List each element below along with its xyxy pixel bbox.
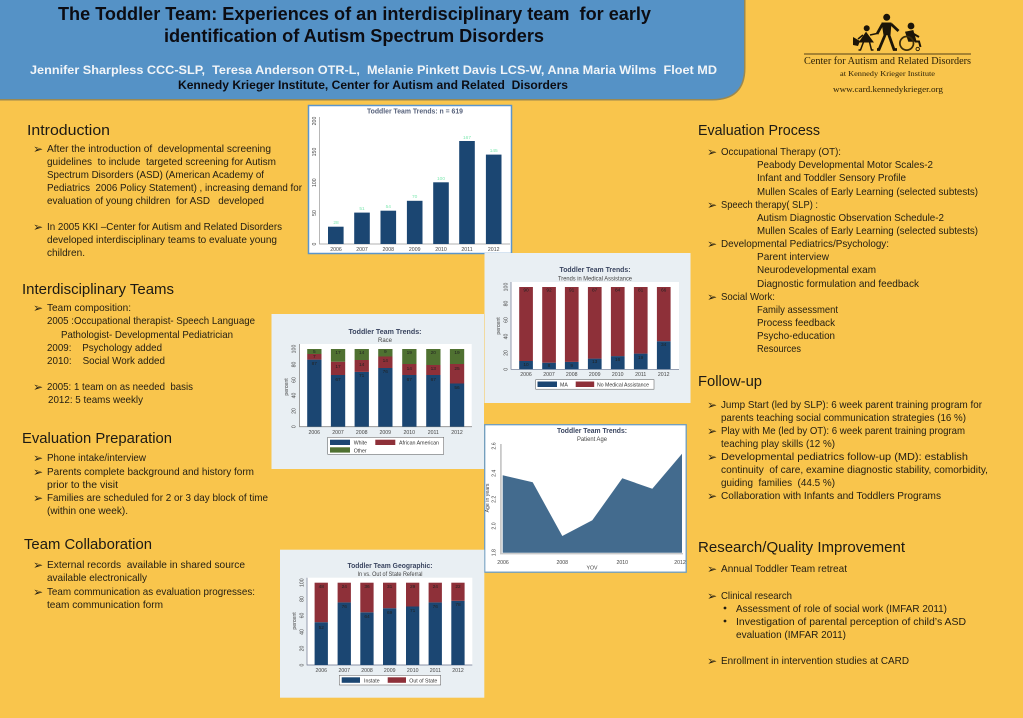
stacked bar chart: In vs. Out of State Referral: 29 <box>410 584 416 590</box>
stacked bar chart: In vs. Out of State Referral: 48 <box>319 584 324 590</box>
area chart: Patient Age: YOV <box>587 566 598 572</box>
bar chart: Trends in Medical Assistance: 80 <box>504 301 510 306</box>
stacked bar chart: In vs. Out of State Referral: 2011 <box>430 668 441 674</box>
text block: research bullets: Investigation of parental perception of child’s ASD <box>736 616 966 628</box>
text block: preparation bullets: Families are scheduled for 2 or 3 day block of time <box>47 492 268 504</box>
logo: Center for Autism and Related Disorders: at Kennedy Krieger Institute <box>840 69 936 78</box>
text block: preparation bullets <box>33 451 268 517</box>
area chart: Patient Age: 1.8 <box>492 549 498 556</box>
text block: collaboration bullets: External records available in shared source <box>47 559 245 571</box>
bar chart: Toddler Team Trends n = 619: 145 <box>490 148 498 154</box>
legend: No Medical Assistance <box>597 382 649 388</box>
text block: team composition: Pathologist- Developmental Pediatrician <box>61 329 233 341</box>
legend: MA <box>560 382 568 388</box>
text block: evaluation process list: Parent interview <box>757 251 829 263</box>
stacked bar chart: Race: 17 <box>335 364 341 370</box>
text block: evaluation process list: Diagnostic formulation and feedback <box>757 278 920 290</box>
stacked bar chart: In vs. Out of State Referral: 80 <box>300 596 306 602</box>
stacked bar chart: In vs. Out of State Referral: 20 <box>300 646 306 651</box>
stacked bar chart: Race: 20 <box>431 350 436 356</box>
stacked bar chart: Race: percent <box>284 378 290 396</box>
text block: evaluation process list: Resources <box>757 343 801 355</box>
title <box>58 4 651 46</box>
bar chart: Trends in Medical Assistance: 100 <box>504 283 510 291</box>
text block: research bullets: evaluation (IMFAR 2011) <box>736 629 846 641</box>
stacked bar chart: Race: 14 <box>359 350 365 356</box>
area chart: Patient Age: Toddler Team Trends: <box>557 426 627 435</box>
text block: introduction bullets: In 2005 KKI –Center for Autism and Related Disorders <box>47 221 282 233</box>
text block: team composition: Team composition: <box>47 302 131 314</box>
stacked bar chart: Race: 14 <box>407 366 412 372</box>
text block: evaluation process list: Developmental Pediatrics/Psychology: <box>721 238 889 250</box>
bar chart: Trends in Medical Assistance <box>484 253 690 403</box>
legend: Out of State <box>409 678 437 684</box>
header banner <box>0 0 746 100</box>
stacked bar chart: Race: Race <box>378 338 393 344</box>
stacked bar chart: In vs. Out of State Referral: 36 <box>364 584 370 590</box>
bar chart: Trends in Medical Assistance: 19 <box>638 355 644 361</box>
bar chart: Trends in Medical Assistance: 20 <box>504 350 510 356</box>
stacked bar chart: In vs. Out of State Referral: 100 <box>300 578 306 587</box>
text block: follow-up bullets: Jump Start (led by SLP): 6 week parent training program for <box>721 399 982 411</box>
text block: follow-up bullets: ➢ <box>707 450 717 464</box>
text block: introduction bullets: guidelines to include targeted screening for Autism <box>47 156 276 168</box>
bar chart: Trends in Medical Assistance: 84 <box>615 288 621 294</box>
bar chart: Trends in Medical Assistance: 2010 <box>612 372 624 378</box>
area chart: Patient Age: 2006 <box>497 560 509 566</box>
text block: evaluation process list: Process feedback <box>757 317 836 329</box>
text block: follow-up bullets: teaching play skills (12 %) <box>721 438 835 450</box>
text block: introduction bullets: Pediatrics 2006 Policy Statement) , increasing demand for <box>47 182 302 194</box>
text block: follow-up bullets: Developmental pediatrics follow-up (MD): establish <box>721 451 968 463</box>
text block: follow-up bullets: parents teaching social communication strategies (16 %) <box>721 412 966 424</box>
heading: Interdisciplinary Teams: Interdisciplinary Teams <box>22 281 174 298</box>
area chart: Patient Age: 2010 <box>617 560 628 566</box>
stacked bar chart: Race: 67 <box>431 377 436 383</box>
area chart: Patient Age: 2.6 <box>492 442 498 450</box>
text block: collaboration bullets: Team communication as evaluation progresses: <box>47 586 255 598</box>
stacked bar chart: In vs. Out of State Referral: 2010 <box>407 668 419 674</box>
stacked bar chart: Race: 71 <box>359 373 365 379</box>
bar chart: Trends in Medical Assistance: percent <box>496 317 502 335</box>
bar chart: Toddler Team Trends n = 619: 2010 <box>435 247 447 253</box>
stacked bar chart: In vs. Out of State Referral: 2007 <box>339 668 350 674</box>
stacked bar chart: Race: 17 <box>335 350 341 356</box>
bar chart: Toddler Team Trends n = 619 <box>308 106 512 254</box>
legend: African American <box>399 440 439 446</box>
stacked bar chart: In vs. Out of State Referral: Toddler Team Geographic: <box>348 561 432 570</box>
stacked bar chart: Race: 19 <box>407 350 412 356</box>
text block: introduction bullets: Spectrum Disorders (ASD) (American Academy of <box>47 169 264 181</box>
text block: research bullets: Annual Toddler Team retreat <box>721 563 847 575</box>
text block: evaluation process list: Speech therapy( SLP) : <box>721 199 818 211</box>
text block: team composition: 2012: 5 teams weekly <box>48 394 144 406</box>
bar chart: Toddler Team Trends n = 619: 2012 <box>488 247 500 253</box>
stacked bar chart: Race: 14 <box>359 362 365 368</box>
text block: follow-up bullets: guiding families (44.5 %) <box>721 477 835 489</box>
text block: follow-up bullets: Collaboration with Infants and Toddlers Programs <box>721 490 941 502</box>
heading: Research/Quality Improvement: Research/Quality Improvement <box>698 539 906 556</box>
text block: collaboration bullets: ➢ <box>33 585 43 599</box>
text block: team composition: 2010: Social Work added <box>47 355 165 367</box>
bar chart: Toddler Team Trends n = 619: 150 <box>312 148 318 156</box>
legend <box>339 675 441 685</box>
bar chart: Toddler Team Trends n = 619: 51 <box>359 206 365 212</box>
text block: evaluation process list: ➢ <box>707 290 717 304</box>
heading: Evaluation Process: Evaluation Process <box>698 122 820 139</box>
stacked bar chart: Race: 25 <box>454 366 460 372</box>
text block: evaluation process list: Autism Diagnostic Observation Schedule-2 <box>757 212 944 224</box>
heading: Introduction: Introduction <box>27 122 110 139</box>
bar chart: Toddler Team Trends n = 619: Toddler Team Trends: n = 619 <box>367 106 463 116</box>
authors: Jennifer Sharpless CCC-SLP, Teresa Anderson OTR-L, Melanie Pinkett Davis LCS-W, Anna Maria Wilms Floet MD <box>30 63 717 77</box>
heading: Evaluation Preparation: Evaluation Preparation <box>22 430 172 447</box>
stacked bar chart: In vs. Out of State Referral: 2006 <box>316 668 327 674</box>
text block: evaluation process list: ➢ <box>707 237 717 251</box>
stacked bar chart: Race: 40 <box>292 393 298 398</box>
stacked bar chart: Race: 56 <box>454 385 460 391</box>
text block: team composition: 2005 :Occupational therapist- Speech Language <box>47 315 255 327</box>
stacked bar chart: In vs. Out of State Referral: 24 <box>433 584 438 590</box>
logo: Center for Autism and Related Disorders: Center for Autism and Related Disorders <box>804 56 971 67</box>
text block: introduction bullets: children. <box>47 247 85 259</box>
bar chart: Trends in Medical Assistance: 92 <box>546 288 552 294</box>
stacked bar chart: Race: 2008 <box>356 430 368 436</box>
stacked bar chart: In vs. Out of State Referral: 0 <box>300 663 306 666</box>
heading: Follow-up: Follow-up <box>698 373 762 390</box>
bar chart: Toddler Team Trends n = 619: 70 <box>412 194 418 200</box>
bar chart: Trends in Medical Assistance: 66 <box>661 288 667 294</box>
text block: research bullets: Clinical research <box>721 590 792 602</box>
stacked bar chart: Race: 20 <box>292 408 298 414</box>
bar chart: Trends in Medical Assistance: 2008 <box>566 372 578 378</box>
panel: Interdisciplinary Teams <box>22 281 255 406</box>
legend <box>328 437 444 454</box>
stacked bar chart: Race: 2009 <box>380 430 391 436</box>
bar chart: Toddler Team Trends n = 619: 50 <box>312 210 318 216</box>
logo: Center for Autism and Related Disorders: www.card.kennedykrieger.org <box>833 85 943 94</box>
text block: evaluation process list: Neurodevelopmental exam <box>757 264 876 276</box>
text block: evaluation process list <box>707 145 978 355</box>
text block: evaluation process list: Psycho-education <box>757 330 835 342</box>
text block: preparation bullets: ➢ <box>33 491 43 505</box>
bar chart: Trends in Medical Assistance: Toddler Team Trends: <box>560 265 630 274</box>
stacked bar chart: Race: 14 <box>383 358 388 364</box>
stacked bar chart: Race: 19 <box>454 350 460 356</box>
text block: follow-up bullets: ➢ <box>707 398 717 412</box>
text block: evaluation process list: ➢ <box>707 198 717 212</box>
stacked bar chart: Race: 13 <box>431 366 436 372</box>
stacked bar chart: In vs. Out of State Referral: 31 <box>387 584 393 590</box>
stacked bar chart: Race: 2010 <box>404 430 415 436</box>
area chart: Patient Age: Patient Age <box>577 437 608 443</box>
bar chart: Trends in Medical Assistance: 8 <box>548 363 551 369</box>
stacked bar chart: Race: 2011 <box>428 430 439 436</box>
stacked bar chart: In vs. Out of State Referral: 2009 <box>384 668 396 674</box>
bar chart: Trends in Medical Assistance: 10 <box>523 362 529 368</box>
stacked bar chart: In vs. Out of State Referral: percent <box>292 612 298 630</box>
bar chart: Trends in Medical Assistance: 60 <box>504 317 510 323</box>
stacked bar chart: Race: 2007 <box>332 430 344 436</box>
text block: evaluation process list: Social Work: <box>721 291 775 303</box>
bar chart: Trends in Medical Assistance: 40 <box>504 334 510 339</box>
stacked bar chart: In vs. Out of State Referral: 64 <box>364 614 370 620</box>
text block: evaluation process list: Infant and Toddler Sensory Profile <box>757 172 906 184</box>
text block: preparation bullets: (within one week). <box>47 505 128 517</box>
bar chart: Trends in Medical Assistance: 2009 <box>589 372 601 378</box>
stacked bar chart: Race <box>272 314 484 469</box>
stacked bar chart: Race: 80 <box>292 362 298 367</box>
bar chart: Toddler Team Trends n = 619: 2007 <box>356 247 368 253</box>
text block: research bullets: ➢ <box>707 654 717 668</box>
text block: preparation bullets: ➢ <box>33 465 43 479</box>
text block: introduction bullets <box>33 142 302 259</box>
stacked bar chart: Race: 2012 <box>451 430 463 436</box>
area chart: Patient Age: Age in years <box>485 483 491 512</box>
panel: Evaluation Process <box>698 122 978 355</box>
affiliation: Kennedy Krieger Institute, Center for Autism and Related Disorders <box>178 78 568 92</box>
bar chart: Toddler Team Trends n = 619: 200 <box>312 117 318 125</box>
bar chart: Trends in Medical Assistance: 81 <box>638 288 644 294</box>
stacked bar chart: In vs. Out of State Referral: 2008 <box>361 668 373 674</box>
bar chart: Toddler Team Trends n = 619: 167 <box>463 135 471 141</box>
bar chart: Toddler Team Trends n = 619: 2009 <box>409 247 421 253</box>
text block: follow-up bullets: continuity of care, examine diagnostic stability, comorbidity, <box>721 464 988 476</box>
bar chart: Trends in Medical Assistance: 0 <box>504 368 510 371</box>
logo: Center for Autism and Related Disorders <box>804 14 971 94</box>
stacked bar chart: In vs. Out of State Referral: 22 <box>455 584 461 590</box>
area chart: Patient Age: 2012 <box>674 560 686 566</box>
text block: introduction bullets: ➢ <box>33 142 43 156</box>
stacked bar chart: In vs. Out of State Referral: 40 <box>300 629 306 635</box>
text block: research bullets: ➢ <box>707 562 717 576</box>
area chart: Patient Age <box>485 425 686 572</box>
panel: Evaluation Preparation <box>22 430 268 517</box>
bar chart: Trends in Medical Assistance: 90 <box>523 288 529 294</box>
text block: follow-up bullets <box>707 398 988 503</box>
stacked bar chart: In vs. Out of State Referral: 71 <box>410 608 416 614</box>
text block: evaluation process list: Peabody Developmental Motor Scales-2 <box>757 159 933 171</box>
text block: preparation bullets: Phone intake/interview <box>47 452 146 464</box>
bar chart: Trends in Medical Assistance: 2007 <box>543 372 555 378</box>
legend: White <box>354 440 367 446</box>
stacked bar chart: In vs. Out of State Referral: 69 <box>387 610 393 616</box>
text block: evaluation process list: Occupational Therapy (OT): <box>721 146 841 158</box>
text block: team composition: 2009: Psychology added <box>47 342 162 354</box>
stacked bar chart: In vs. Out of State Referral: 60 <box>300 613 306 618</box>
legend: Other <box>354 448 367 454</box>
stacked bar chart: In vs. Out of State Referral: 78 <box>455 602 461 608</box>
text block: collaboration bullets: team communication form <box>47 599 163 611</box>
panel: Follow-up <box>698 373 988 503</box>
panel: Introduction <box>27 122 302 259</box>
text block: research bullets <box>707 562 966 668</box>
bar chart: Trends in Medical Assistance: 34 <box>661 342 667 348</box>
text block: team composition: ➢ <box>33 380 43 394</box>
legend: Instate <box>364 678 380 684</box>
area chart: Patient Age: 2.2 <box>492 496 498 503</box>
text block: collaboration bullets: available electronically <box>47 572 148 584</box>
text block: introduction bullets: developed interdisciplinary teams to evaluate young <box>47 234 277 246</box>
bar chart: Toddler Team Trends n = 619: 2011 <box>461 247 473 253</box>
stacked bar chart: In vs. Out of State Referral: 52 <box>319 625 324 631</box>
stacked bar chart: Race: 7 <box>313 354 316 360</box>
bar chart: Toddler Team Trends n = 619: 2008 <box>383 247 394 253</box>
bar chart: Toddler Team Trends n = 619: 54 <box>386 204 391 210</box>
title: identification of Autism Spectrum Disorders <box>164 26 544 46</box>
bar chart: Trends in Medical Assistance: 2012 <box>658 372 670 378</box>
stacked bar chart: Race: 100 <box>292 345 298 353</box>
bar chart: Trends in Medical Assistance: 13 <box>592 359 598 365</box>
stacked bar chart: In vs. Out of State Referral: 76 <box>342 604 347 610</box>
text block: collaboration bullets: ➢ <box>33 558 43 572</box>
bar chart: Trends in Medical Assistance: Trends in Medical Assistance <box>558 276 633 282</box>
text block: preparation bullets: prior to the visit <box>47 479 118 491</box>
text block: evaluation process list: Mullen Scales of Early Learning (selected subtests) <box>757 225 978 237</box>
text block: research bullets: Enrollment in intervention studies at CARD <box>721 655 909 667</box>
text block: follow-up bullets: ➢ <box>707 489 717 503</box>
stacked bar chart: In vs. Out of State Referral: 76 <box>433 604 438 610</box>
stacked bar chart: Race: Toddler Team Trends: <box>348 327 422 336</box>
stacked bar chart: Race: 87 <box>312 361 317 367</box>
stacked bar chart: In vs. Out of State Referral <box>280 550 484 698</box>
bar chart: Trends in Medical Assistance: 91 <box>569 288 575 294</box>
stacked bar chart: Race: 67 <box>335 377 341 383</box>
heading: Team Collaboration: Team Collaboration <box>24 536 152 553</box>
title: The Toddler Team: Experiences of an interdisciplinary team for early <box>58 4 651 24</box>
stacked bar chart: Race: 60 <box>292 377 298 383</box>
text block: preparation bullets: ➢ <box>33 451 43 465</box>
bar chart: Trends in Medical Assistance: 2011 <box>635 372 646 378</box>
bar chart: Toddler Team Trends n = 619: 100 <box>437 176 445 182</box>
text block: collaboration bullets <box>33 558 255 611</box>
text block: preparation bullets: Parents complete background and history form <box>47 466 254 478</box>
text block: introduction bullets: ➢ <box>33 220 43 234</box>
text block: introduction bullets: evaluation of young children for ASD developed <box>47 195 264 207</box>
bar chart: Trends in Medical Assistance: 2006 <box>520 372 532 378</box>
legend <box>536 380 654 389</box>
bar chart: Toddler Team Trends n = 619: 2006 <box>330 247 342 253</box>
stacked bar chart: Race: 2006 <box>309 430 320 436</box>
text block: team composition: 2005: 1 team on as needed basis <box>47 381 193 393</box>
stacked bar chart: Race: 9 <box>384 349 387 355</box>
text block: team composition: ➢ <box>33 301 43 315</box>
bar chart: Trends in Medical Assistance: 9 <box>570 363 573 369</box>
panel: Team Collaboration <box>24 536 255 611</box>
text block: evaluation process list: ➢ <box>707 145 717 159</box>
area chart: Patient Age: 2.0 <box>492 522 498 530</box>
text block: research bullets: ➢ <box>707 589 717 603</box>
text block: evaluation process list: Family assessment <box>757 304 838 316</box>
stacked bar chart: In vs. Out of State Referral: 2012 <box>452 668 464 674</box>
bar chart: Trends in Medical Assistance: 87 <box>592 288 598 294</box>
bar chart: Trends in Medical Assistance: 16 <box>615 357 621 363</box>
text block: introduction bullets: After the introduction of developmental screening <box>47 143 271 155</box>
bar chart: Toddler Team Trends n = 619: 28 <box>333 220 339 226</box>
panel: Research/Quality Improvement <box>698 539 966 668</box>
text block: evaluation process list: Mullen Scales of Early Learning (selected subtests) <box>757 186 978 198</box>
text block: research bullets: Assessment of role of social work (IMFAR 2011) <box>736 603 947 615</box>
stacked bar chart: Race: 67 <box>407 377 412 383</box>
bar chart: Toddler Team Trends n = 619: 0 <box>312 242 318 245</box>
stacked bar chart: Race: 5 <box>313 349 316 355</box>
stacked bar chart: Race: 0 <box>292 425 298 428</box>
text block: team composition <box>33 301 255 406</box>
text block: follow-up bullets: ➢ <box>707 424 717 438</box>
area chart: Patient Age: 2008 <box>557 560 568 566</box>
stacked bar chart: In vs. Out of State Referral: 24 <box>342 584 347 590</box>
stacked bar chart: In vs. Out of State Referral: In vs. Out of State Referral <box>358 572 422 578</box>
stacked bar chart: Race: 76 <box>383 369 388 375</box>
bar chart: Toddler Team Trends n = 619: 100 <box>312 178 318 187</box>
area chart: Patient Age: 2.4 <box>492 470 498 477</box>
text block: follow-up bullets: Play with Me (led by OT): 6 week parent training program <box>721 425 965 437</box>
icon: child, adult and wheelchair user silhouettes <box>853 14 920 51</box>
